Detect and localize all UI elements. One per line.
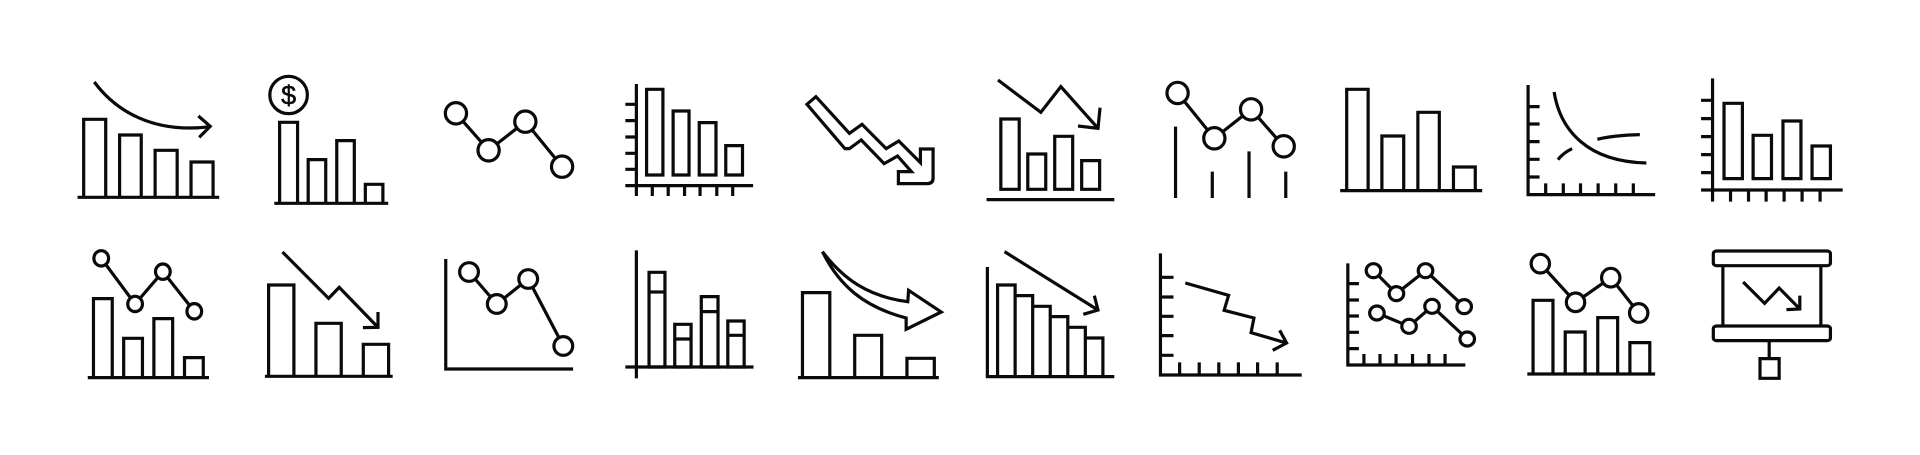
icon: bars on ticked crossing axes <box>1701 78 1843 202</box>
icon: bars with zigzag arrow <box>987 80 1114 200</box>
icon: three bars with down arrow <box>265 252 393 376</box>
icon: node line over vertical lines <box>1167 82 1294 198</box>
icon: four bar chart <box>1340 89 1482 191</box>
icon: bars on ticked axes <box>625 84 753 196</box>
icon: zigzag arrow on ticked axes <box>1160 253 1302 375</box>
icon: decay curve on ticked axes <box>1528 85 1655 195</box>
icon: six descending bars with arrow <box>987 252 1114 377</box>
icon: three bars with swoosh arrow <box>798 252 941 378</box>
icon: two node lines on ticked axes <box>1348 263 1475 365</box>
icon: bars with curved down arrow <box>78 82 219 197</box>
icon: bars with dollar coin <box>270 76 388 203</box>
icon: outlined zigzag down arrow <box>807 97 933 184</box>
icon: node line in L axes <box>446 259 573 369</box>
icon: line chart with four nodes <box>445 103 573 177</box>
icon: bars with large node line <box>1527 254 1655 374</box>
icon: bars under node line <box>88 251 209 378</box>
icon: stacked bars on axes <box>625 250 754 378</box>
icon: presentation board with falling chart <box>1713 251 1830 378</box>
icon: bars with dollar coin: $ <box>281 80 296 110</box>
